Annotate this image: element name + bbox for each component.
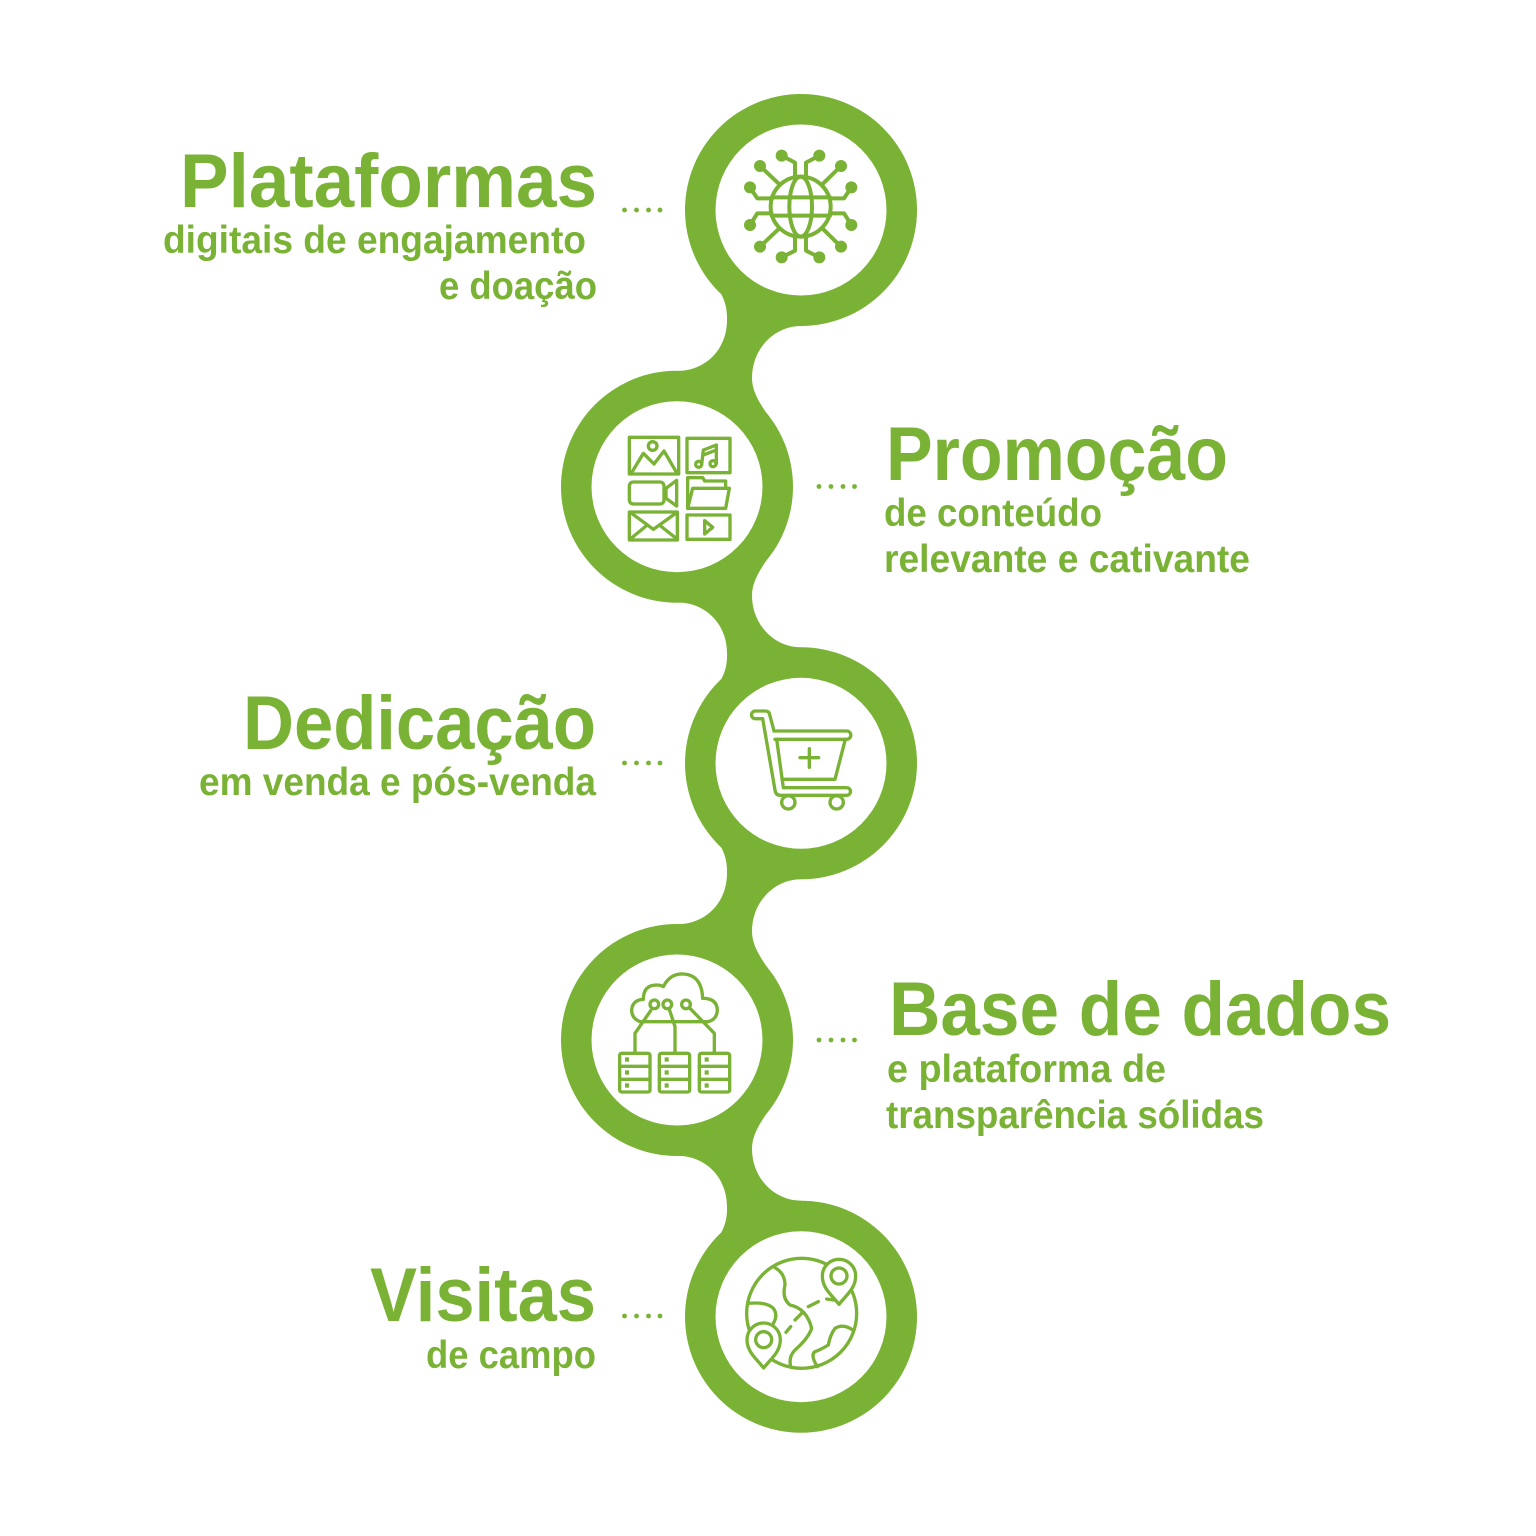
text block: Promoção: Promoção [886, 412, 1228, 497]
text block: Promoção: relevante e cativante [884, 538, 1250, 581]
text block: Visitas: de campo [426, 1334, 596, 1377]
connector dots: Plataformas [622, 208, 662, 212]
text block: Visitas [370, 1253, 596, 1377]
text block: Dedicação: em venda e pós-venda [199, 761, 596, 804]
text block: Plataformas: e doação [439, 265, 597, 308]
text block: Promoção [884, 412, 1250, 581]
text block: Base de dados: e plataforma de [887, 1048, 1166, 1091]
serpentine path [561, 94, 917, 1433]
icon: media files grid [629, 437, 730, 540]
text block: Plataformas: Plataformas [180, 139, 597, 224]
icon: shopping cart [751, 711, 851, 809]
connector dots: Base de dados [817, 1038, 857, 1042]
text block: Plataformas [163, 139, 597, 308]
text block: Base de dados [886, 967, 1391, 1137]
text block: Plataformas: digitais de engajamento [163, 219, 586, 262]
icon: cloud database [620, 974, 730, 1092]
connector dots: Visitas [622, 1314, 662, 1318]
connector dots: Promoção [817, 484, 857, 489]
icon: digital globe network [744, 150, 857, 263]
text block: Visitas: Visitas [370, 1253, 596, 1338]
text block: Dedicação: Dedicação [243, 681, 596, 766]
text block: Base de dados: Base de dados [889, 967, 1391, 1052]
text block: Promoção: de conteúdo [884, 492, 1102, 535]
text block: Dedicação [199, 681, 596, 804]
icon: globe with location pins [747, 1258, 857, 1368]
connector dots: Dedicação [622, 761, 662, 765]
text block: Base de dados: transparência sólidas [886, 1094, 1264, 1137]
